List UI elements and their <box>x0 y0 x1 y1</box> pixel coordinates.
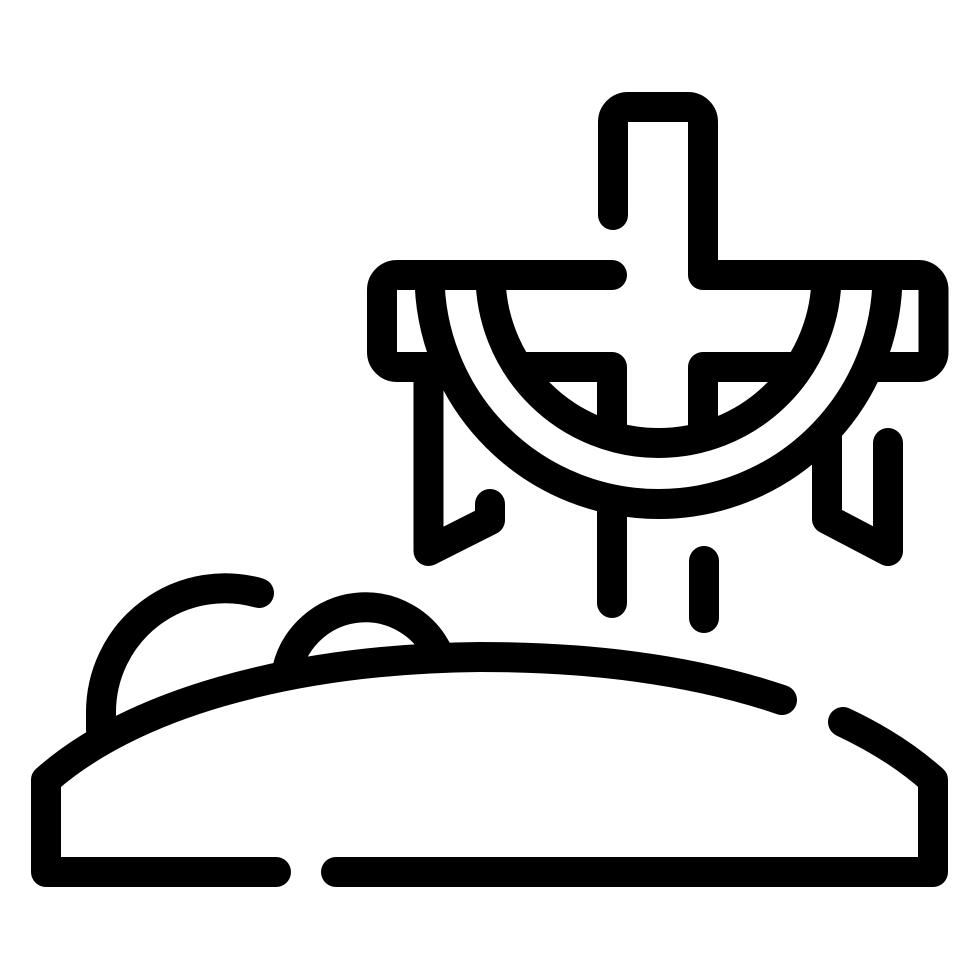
draped cloth arcs <box>430 275 888 504</box>
stone on hill <box>287 607 439 670</box>
rock arc on hill <box>101 588 259 730</box>
cloth white band <box>460 275 857 473</box>
cross: lower bar and post behind the cloth <box>382 300 934 618</box>
cross: upper outline in front of the cloth <box>382 107 934 310</box>
cloth tails <box>428 375 888 551</box>
hill <box>46 657 933 872</box>
